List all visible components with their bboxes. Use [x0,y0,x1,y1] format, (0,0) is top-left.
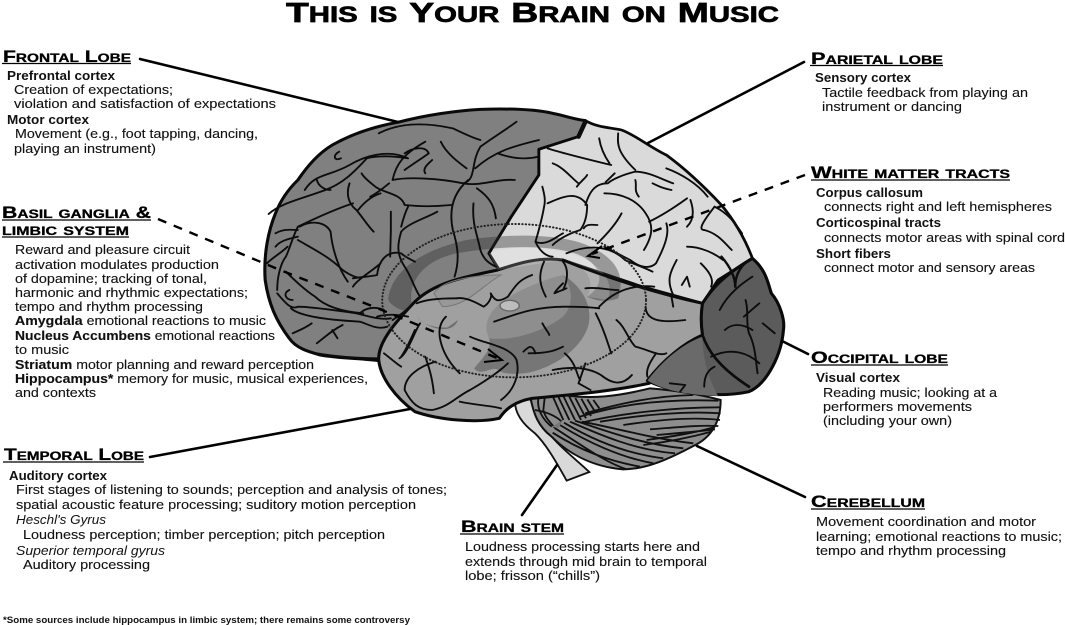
panel: white matter tracts [811,164,1065,275]
panel: frontal lobe: Frontal Lobe [3,48,131,66]
panel: basal ganglia and limbic system: Reward and pleasure circuit [15,242,190,257]
panel: cerebellum: Cerebellum [811,493,925,511]
leader line: temporal lobe [150,409,410,457]
panel: frontal lobe: Movement (e.g., foot tapping, dancing, [15,126,258,141]
panel: frontal lobe: Creation of expectations; [14,82,173,97]
leader line: occipital lobe [782,341,808,354]
footnote: *Some sources include hippocampus in limbic system; there remains some controversy [3,615,410,625]
panel: basal ganglia and limbic system: tempo and rhythm processing [15,299,203,314]
panel: parietal lobe: Parietal lobe [811,50,943,68]
panel: cerebellum [811,493,1062,558]
panel: temporal lobe: Temporal Lobe [4,446,144,464]
panel: occipital lobe: Occipital lobe [811,349,948,367]
temporal lobe [379,259,704,421]
occipital sulci [670,258,775,392]
panel: white matter tracts: connects motor areas with spinal cord [824,230,1065,245]
panel: frontal lobe: Prefrontal cortex [7,68,116,83]
panel: frontal lobe: violation and satisfaction of expectations [14,96,277,111]
dotted ellipse [382,224,646,377]
panel: white matter tracts: Corpus callosum [816,185,923,200]
occipital lobe [647,258,784,395]
cerebellum [531,388,721,469]
panel: basal ganglia and limbic system [2,204,368,400]
cerebrum lobes [265,109,784,421]
panel: basal ganglia and limbic system: Hippocampus* memory for music, musical experiences, [15,371,368,386]
panel: white matter tracts: connects right and left hemispheres [824,199,1053,214]
panel: white matter tracts: White matter tracts [811,164,1010,182]
panel: white matter tracts: connect motor and sensory areas [824,260,1036,275]
panel: temporal lobe: Auditory cortex [9,468,108,483]
panel: basal ganglia and limbic system: of dopamine; tracking of tonal, [15,271,207,286]
temporal sulci [384,262,685,410]
panel: brain stem: Loudness processing starts here and [465,539,700,554]
panel: basal ganglia and limbic system: and contexts [15,385,97,400]
panel: parietal lobe: Sensory cortex [815,70,912,85]
parietal sulci [535,122,742,303]
panel: temporal lobe: First stages of listening to sounds; perception and analysis of tones; [16,482,447,497]
limbic structures overlay [388,236,621,374]
panel: occipital lobe: Visual cortex [816,370,901,385]
panel: frontal lobe: Motor cortex [7,112,90,127]
leader line: brain stem [522,465,557,515]
panel: basal ganglia and limbic system: Basil ganglia & [2,204,151,222]
parietal lobe [489,121,752,303]
panel: basal ganglia and limbic system: limbic system [2,221,129,239]
panel: brain stem: extends through mid brain to temporal [465,554,707,569]
panel: occipital lobe: (including your own) [823,413,952,428]
panel: brain stem [460,518,707,583]
panel: basal ganglia and limbic system: activation modulates production [15,257,219,272]
panel: parietal lobe: instrument or dancing [822,99,962,114]
panel: temporal lobe [3,446,447,572]
panel: parietal lobe [810,50,1028,114]
panel: occipital lobe: Reading music; looking at a [823,385,998,400]
panel: frontal lobe: playing an instrument) [14,141,156,156]
panel: brain stem: Brain stem [461,518,564,536]
panel: basal ganglia and limbic system: Amygdala emotional reactions to music [15,313,267,328]
leader line: cerebellum [697,446,805,497]
panel: parietal lobe: Tactile feedback from playing an [822,85,1028,100]
leader line: basal ganglia and limbic system [158,219,502,362]
brain illustration [265,109,784,481]
panel: cerebellum: tempo and rhythm processing [816,543,1006,558]
panel: temporal lobe: Superior temporal gyrus [16,543,166,558]
leader line: parietal lobe [648,62,804,143]
panel: basal ganglia and limbic system: to music [15,342,70,357]
panel: brain stem: lobe; frisson (“chills”) [465,568,600,583]
panel: cerebellum: Movement coordination and motor [816,514,1037,529]
panel: white matter tracts: Short fibers [816,246,891,261]
panel: temporal lobe: Loudness perception; timber perception; pitch perception [23,527,385,542]
panel: temporal lobe: spatial acoustic feature processing; suditory motion perception [16,497,416,512]
frontal lobe [265,109,585,361]
panel: cerebellum: learning; emotional reactions to music; [816,529,1062,544]
leader line: white matter tracts [588,175,805,258]
panel: white matter tracts: Corticospinal tracts [816,215,941,230]
frontal sulci [267,122,539,358]
brain stem shape [515,398,589,481]
panel: occipital lobe: performers movements [823,399,973,414]
leader line: frontal lobe [140,59,398,122]
panel: basal ganglia and limbic system: harmonic and rhythmic expectations; [15,285,248,300]
panel: frontal lobe [2,48,277,156]
panel: basal ganglia and limbic system: Nucleus Accumbens emotional reactions [15,328,276,343]
panel: basal ganglia and limbic system: Striatum motor planning and reward perception [15,357,314,372]
panel: temporal lobe: Auditory processing [23,557,150,572]
panel: temporal lobe: Heschl's Gyrus [16,512,107,527]
panel: occipital lobe [811,349,998,428]
